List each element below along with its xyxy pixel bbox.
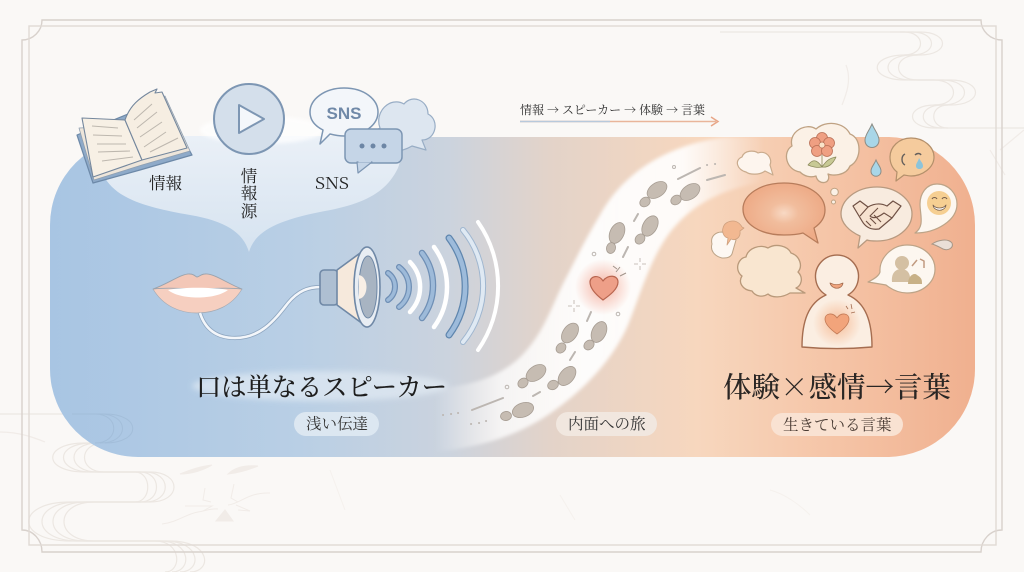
cloud with flower [786, 123, 859, 183]
glow behind left title [192, 371, 448, 401]
label: 情報源 vertical: 源 [241, 198, 258, 222]
bottom-left wave pattern [0, 414, 205, 572]
handshake bubble [841, 187, 912, 248]
person with heart [802, 255, 872, 348]
pill: living words: 生きている言葉 [783, 413, 892, 435]
right title: 体験×感情→言葉 [723, 365, 951, 406]
bottom-left brush strokes [162, 465, 810, 524]
icon: lips [153, 274, 242, 313]
pill: shallow communication: 浅い伝達 [306, 412, 368, 434]
footprints on the path [500, 178, 703, 421]
speaker cable [200, 287, 321, 338]
label: 情報源 vertical [241, 163, 258, 222]
smiling face teardrop [915, 184, 957, 233]
label: 情報: 情報 [149, 170, 182, 194]
information source bubble [105, 136, 400, 252]
pill: journey inward: 内面への旅 [568, 412, 646, 434]
label: 情報源 vertical: 報 [241, 180, 258, 204]
top flow arrow [520, 117, 718, 126]
top flow caption: 情報 → スピーカー → 体験 → 言葉 [520, 101, 705, 118]
pill: shallow communication [294, 412, 379, 436]
water drops [865, 124, 881, 176]
crying face bubble [890, 138, 934, 181]
thought dots [831, 188, 838, 204]
wave overlay on band [72, 414, 133, 443]
sound waves [388, 222, 498, 350]
big speech bubble [743, 183, 825, 243]
top glow behind play button [200, 116, 324, 144]
left title: 口は単なるスピーカー [196, 368, 447, 404]
people photo bubble [868, 245, 935, 293]
label: SNS: SNS [315, 170, 349, 194]
small cloud top-left of group [737, 151, 773, 175]
small grey droplet [932, 240, 952, 250]
heart on the path with glow [568, 258, 646, 315]
small cloud pair at left [711, 221, 744, 258]
top-right wave pattern [720, 32, 1024, 175]
label: 情報源 vertical: 情 [241, 163, 258, 187]
path dashes and dots [443, 164, 725, 424]
icon: SNS chat bubbles and cloud: SNS [327, 104, 361, 123]
large cream cloud [738, 246, 805, 297]
main gradient band [50, 137, 975, 457]
icon: loudspeaker [320, 247, 380, 327]
winding inner journey path [430, 137, 762, 452]
icon: open book [77, 89, 192, 183]
icon: SNS chat bubbles and cloud [310, 88, 435, 173]
icon: play button [214, 84, 284, 154]
